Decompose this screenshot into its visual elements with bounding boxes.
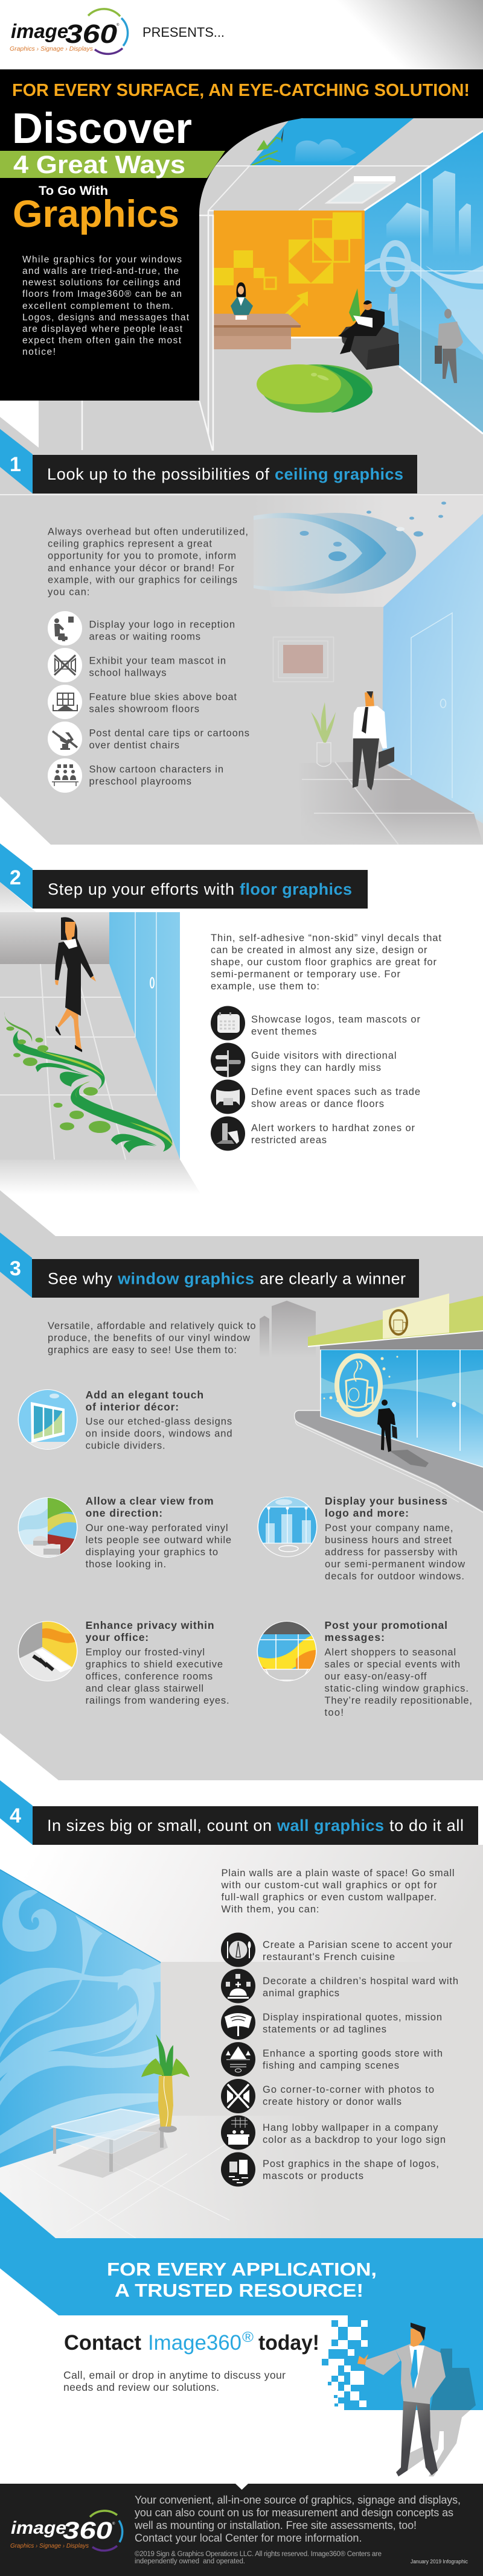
glass table: [51, 2109, 168, 2178]
section 4 illustration: [0, 1821, 483, 2238]
heading: wall graphics: wall graphics: [277, 1816, 384, 1835]
black title panel: [0, 69, 483, 401]
logo: image360 footer: [10, 2511, 123, 2551]
shadow: [405, 2349, 476, 2476]
icon: one-way window: [18, 1497, 78, 1562]
item: interior decor: on inside doors, windows and: [86, 1429, 232, 1439]
list: floor uses: show areas or dance floors: [251, 1099, 384, 1109]
list: floor uses: event themes: [251, 1026, 316, 1037]
contact text: [63, 2369, 286, 2393]
item: privacy: Enhance privacy within: [86, 1619, 214, 1631]
section 1 text: and enhance your décor or brand! For: [48, 563, 234, 574]
list: ceiling uses: Post dental care tips or cartoons: [89, 728, 249, 738]
heading: floor graphics: floor graphics: [240, 880, 352, 898]
section 2 text: semi-permanent or temporary use. For: [211, 969, 401, 980]
list: floor uses: Define event spaces such as trade: [251, 1087, 420, 1097]
legal text: [135, 2551, 382, 2565]
intro text: expect them often gain the most: [22, 335, 182, 346]
section 2 text: Thin, self-adhesive “non-skid” vinyl decals that: [211, 933, 441, 944]
floor: [299, 761, 483, 845]
list: ceiling uses: [48, 611, 249, 793]
floor: [0, 2116, 483, 2238]
icon: reception seating: [48, 611, 82, 646]
heading: window graphics: See why: [48, 1269, 112, 1287]
section 1 text: you can:: [48, 586, 89, 597]
item: business logo: [257, 1495, 465, 1582]
list: wall uses: Decorate a children’s hospital ward with: [263, 1976, 458, 1987]
back wall: [161, 1962, 483, 2119]
intro text: While graphics for your windows: [22, 255, 182, 265]
section 1 text: opportunity for you to promote, inform: [48, 551, 236, 562]
coffee cup decal: [324, 1353, 398, 1417]
list: wall uses: Create a Parisian scene to accent your: [263, 1940, 453, 1950]
item: business logo: decals for outdoor windows.: [325, 1571, 464, 1582]
hero illustration: [82, 118, 483, 451]
footer text: well as mounting or installation. Free site assessments, too!: [134, 2519, 417, 2531]
man with briefcase: [377, 1400, 397, 1452]
sofa and reader: [338, 300, 399, 370]
intro text: notice!: [22, 347, 56, 357]
item: promotional: static-cling window graphics.: [325, 1683, 469, 1694]
contact illustration: [322, 2315, 483, 2476]
item: clear view: those looking in.: [86, 1559, 166, 1570]
logo: image360 footer: Graphics › Signage › Displays: [10, 2542, 89, 2549]
checker pattern: [322, 2315, 483, 2410]
background buildings: [260, 1301, 316, 1357]
section 2 text: shape, our custom floor graphics are great for: [211, 957, 437, 968]
section 3 header: [0, 1232, 419, 1298]
item: interior decor: Add an elegant touch: [86, 1389, 203, 1401]
item: clear view: one direction:: [86, 1507, 162, 1519]
presenter man: [357, 2323, 446, 2476]
heading: wall graphics: to do it all: [389, 1816, 464, 1835]
room edge lines: [82, 211, 214, 451]
storefront illustration: [260, 1293, 483, 1512]
list: floor uses: Showcase logos, team mascots or: [251, 1014, 420, 1025]
heading: wall graphics: In sizes big or small, count on: [47, 1816, 272, 1835]
item: promotional: Alert shoppers to seasonal: [325, 1647, 456, 1658]
logo: image360: 360: [65, 19, 118, 49]
heading: window graphics: [48, 1269, 406, 1287]
list: ceiling uses: preschool playrooms: [89, 776, 191, 787]
legal text: independently owned and operated.: [135, 2558, 245, 2565]
contact text: Call, email or drop in anytime to discuss your: [63, 2369, 286, 2381]
blue wall: [382, 514, 483, 823]
item: interior decor: cubicle dividers.: [86, 1441, 165, 1451]
list: wall uses: color as a backdrop to your logo sign: [263, 2134, 446, 2145]
item: business logo: our semi-permanent window: [325, 1559, 465, 1570]
list: wall uses: statements or ad taglines: [263, 2024, 386, 2035]
heading: to go with: To Go With: [39, 184, 108, 198]
item: promotional: messages:: [325, 1631, 385, 1643]
icon: conference room: [18, 1621, 78, 1683]
list: wall uses: Enhance a sporting goods store with: [263, 2048, 443, 2059]
icon: hallway: [48, 648, 82, 682]
banner heading: [107, 2259, 377, 2301]
section 4 text: full-wall graphics or even custom wallpaper.: [221, 1892, 437, 1903]
item: privacy: Employ our frosted-vinyl: [86, 1647, 205, 1658]
blue banner: [0, 2192, 483, 2315]
list: ceiling uses: areas or waiting rooms: [89, 631, 200, 642]
icon: quotes billboard: [221, 2005, 255, 2040]
list: wall uses: Display inspirational quotes, mission: [263, 2012, 442, 2023]
intro text: excellent complement to them.: [22, 301, 173, 311]
icon: dentist chair: [48, 722, 82, 756]
banner heading: A TRUSTED RESOURCE!: [115, 2280, 363, 2301]
item: business logo: Post your company name,: [325, 1523, 453, 1534]
green vine floor graphic: [5, 1012, 173, 1153]
heading: ceiling graphics: ceiling graphics: [275, 465, 403, 483]
heading: graphics: Graphics: [13, 193, 179, 235]
icon: parisian plate: [221, 1933, 255, 1967]
list: floor uses: restricted areas: [251, 1135, 327, 1146]
list: ceiling uses: Exhibit your team mascot in: [89, 655, 226, 666]
contact heading: ®: [242, 2329, 254, 2346]
intro text: and walls are tried-and-true, the: [22, 266, 179, 276]
intro text: Logos, designs and messages that: [22, 312, 190, 323]
icon: showroom: [48, 685, 82, 719]
section 1 text: ceiling graphics represent a great: [48, 538, 212, 549]
heading: floor graphics: Step up your efforts with: [48, 880, 234, 898]
list: wall uses: Hang lobby wallpaper in a company: [263, 2122, 438, 2133]
intro text: [22, 255, 190, 357]
icon: camping and fishing: [221, 2042, 255, 2076]
footer: [0, 2484, 483, 2576]
plant: [349, 288, 360, 322]
item: privacy: offices, conference rooms: [86, 1671, 213, 1682]
list: wall uses: create history or donor walls: [263, 2096, 401, 2107]
item: promotional: sales or special events with: [325, 1659, 460, 1670]
heading: floor graphics: [48, 880, 352, 898]
section 2 illustration: floor: [0, 882, 201, 1194]
section 2 text: example, use them to:: [211, 981, 319, 992]
footer text: Contact your local Center for more information.: [135, 2532, 362, 2544]
section 3 intro: produce, the benefits of our vinyl window: [48, 1333, 250, 1344]
tagline: FOR EVERY SURFACE, AN EYE-CATCHING SOLUTION!: [12, 81, 470, 100]
item: privacy: railings from wandering eyes.: [86, 1695, 229, 1706]
logo: image360: ®: [117, 23, 120, 27]
skylight: [327, 176, 395, 203]
contact heading: today!: [258, 2331, 319, 2355]
header band: [10, 0, 483, 69]
section 3 intro: [48, 1321, 256, 1356]
list: wall uses: Go corner-to-corner with photos to: [263, 2084, 434, 2095]
list: ceiling uses: Display your logo in reception: [89, 619, 235, 630]
back wall: [0, 912, 109, 964]
intro text: are displayed where people least: [22, 324, 183, 334]
ceiling oval graphic: [254, 502, 446, 594]
item: promotional: too!: [325, 1707, 344, 1718]
picture frame: [273, 637, 333, 682]
section 4 text: With them, you can:: [221, 1904, 319, 1915]
list: ceiling uses: Show cartoon characters in: [89, 764, 223, 775]
orange wall graphic: [214, 211, 365, 338]
section 2 text: can be created in almost any size, design or: [211, 945, 427, 956]
section 3 intro: Versatile, affordable and relatively quick to: [48, 1321, 256, 1331]
ceiling gradient: [0, 1821, 483, 1962]
item: privacy: [18, 1619, 229, 1706]
section 1 background: [0, 401, 483, 845]
item: clear view: lets people see outward while: [86, 1535, 231, 1546]
list: wall uses: [221, 1933, 458, 2186]
ceiling sky graphic: [249, 118, 414, 166]
ceiling area: [254, 495, 483, 607]
contact heading: Image360: [148, 2331, 242, 2355]
list: floor uses: [211, 1006, 420, 1151]
heading: window graphics: window graphics: [117, 1269, 254, 1287]
logo: image360 footer: 360: [63, 2517, 112, 2544]
list: floor uses: signs they can hardly miss: [251, 1062, 381, 1073]
section 2 header: [0, 843, 368, 909]
section 4 text: with our custom-cut wall graphics or opt for: [221, 1880, 437, 1891]
heading: ceiling graphics: Look up to the possibilities of: [47, 465, 269, 483]
number 1: 1: [10, 453, 21, 476]
item: interior decor: of interior décor:: [86, 1401, 179, 1413]
section 1 text: example, with our graphics for ceilings: [48, 574, 237, 585]
item: promotional: They’re readily repositionable,: [325, 1695, 472, 1706]
potted plant: [311, 702, 336, 766]
contact text: needs and review our solutions.: [63, 2381, 219, 2393]
list: floor uses: Guide visitors with directional: [251, 1050, 396, 1061]
number 3: 3: [10, 1257, 21, 1280]
green ribbon: 4 Great Ways: [13, 150, 185, 179]
white corner: [0, 401, 39, 448]
item: interior decor: Use our etched-glass designs: [86, 1416, 232, 1427]
list: wall uses: restaurant's French cuisine: [263, 1952, 395, 1962]
icon: hardhat zone: [211, 1116, 245, 1151]
heading: ceiling graphics: [47, 465, 403, 483]
glass wall: [364, 131, 483, 434]
item: promotional: [257, 1619, 472, 1718]
heading: window graphics: are clearly a winner: [260, 1269, 406, 1287]
list: wall uses: Post graphics in the shape of logos,: [263, 2159, 439, 2169]
intro text: newest solutions for ceilings and: [22, 278, 181, 288]
item: privacy: graphics to shield executive: [86, 1659, 223, 1670]
icon: event space: [211, 1080, 245, 1114]
section 1: ceiling: [254, 495, 483, 845]
vase and plant: [141, 2034, 190, 2133]
number 4: 4: [10, 1804, 21, 1827]
list: ceiling uses: Feature blue skies above boat: [89, 691, 237, 702]
logo: image360: [10, 9, 128, 54]
section 4 header: [0, 1780, 478, 1845]
footer text: Your convenient, all-in-one source of graphics, signage and displays,: [135, 2494, 461, 2506]
item: business logo: business hours and street: [325, 1535, 452, 1546]
icon: hospital: [221, 1969, 255, 2003]
list: floor uses: Alert workers to hardhat zones or: [251, 1123, 415, 1134]
banner heading: FOR EVERY APPLICATION,: [107, 2259, 377, 2280]
item: clear view: [18, 1495, 231, 1570]
section 1 text: Always overhead but often underutilized,: [48, 526, 248, 537]
icon: calendar: [211, 1006, 245, 1040]
window: [321, 1350, 483, 1467]
number 2: 2: [10, 866, 21, 889]
businessman: [353, 691, 394, 790]
section 3 background: [0, 1190, 483, 1780]
section 2 text: [211, 933, 441, 992]
icon: city window: [257, 1497, 318, 1558]
presents: PRESENTS...: [142, 25, 225, 40]
footer text: you can also count on us for measurement and design concepts as: [135, 2507, 453, 2519]
reception desk: [214, 314, 301, 349]
item: privacy: and clear glass stairwell: [86, 1683, 203, 1694]
patterned blue wall: [0, 1870, 161, 2171]
icon: preschool: [48, 758, 82, 793]
intro text: floors from Image360® can be an: [22, 289, 182, 299]
section 1 header: [0, 429, 483, 495]
ceiling lines: [208, 166, 430, 211]
contact heading: [64, 2329, 319, 2355]
sidewalk: [295, 1410, 483, 1512]
walking woman: [55, 917, 96, 1052]
receptionist: [231, 282, 253, 320]
heading: discover: Discover: [12, 105, 192, 153]
list: wall uses: mascots or products: [263, 2171, 363, 2181]
icon: promo window: [257, 1621, 316, 1683]
section 1 text: [48, 526, 248, 597]
fade under floor: [0, 1160, 201, 1194]
item: interior decor: [18, 1389, 232, 1451]
list: wall uses: animal graphics: [263, 1988, 339, 1999]
awning: [308, 1293, 483, 1350]
contact block: [63, 2329, 319, 2393]
section 3 intro: graphics are easy to see! Use them to:: [48, 1345, 237, 1356]
list: wall uses: fishing and camping scenes: [263, 2060, 399, 2071]
icon: directional sign: [211, 1042, 245, 1077]
blue wall: [109, 912, 180, 1160]
item: privacy: your office:: [86, 1631, 149, 1643]
item: business logo: address for passersby with: [325, 1547, 458, 1558]
icon: corner walls: [221, 2079, 255, 2113]
logo: image360 footer: ®: [112, 2522, 115, 2526]
bottom-left corner: [0, 796, 51, 845]
date: January 2019 Infographic: [411, 2559, 468, 2565]
green rug: [257, 364, 373, 413]
section 4 text: [221, 1868, 454, 1915]
section 4 text: Plain walls are a plain waste of space! Go small: [221, 1868, 454, 1879]
legal text: ©2019 Sign & Graphics Operations LLC. All rights reserved. Image360® Centers are: [135, 2551, 382, 2558]
logo: image360: Graphics › Signage › Displays: [10, 45, 94, 52]
heading: wall graphics: [47, 1816, 464, 1835]
item: clear view: Our one-way perforated vinyl: [86, 1523, 228, 1534]
item: promotional: our easy-on/easy-off: [325, 1671, 427, 1682]
item: business logo: logo and more:: [325, 1507, 409, 1519]
item: clear view: Allow a clear view from: [86, 1495, 214, 1507]
icon: logo shapes: [221, 2152, 255, 2186]
contact heading: Contact: [64, 2331, 141, 2355]
logo: image360 footer: image: [11, 2518, 66, 2538]
item: clear view: displaying your graphics to: [86, 1547, 218, 1558]
item: business logo: Display your business: [325, 1495, 447, 1507]
glass wall figure: [388, 287, 398, 326]
walking man: [435, 309, 463, 383]
list: ceiling uses: school hallways: [89, 667, 167, 678]
list: ceiling uses: over dentist chairs: [89, 740, 179, 750]
list: ceiling uses: sales showroom floors: [89, 703, 199, 714]
footer text: [134, 2494, 461, 2544]
item: promotional: Post your promotional: [325, 1619, 447, 1631]
floor: [0, 964, 180, 1160]
icon: lobby desk: [221, 2115, 255, 2150]
logo: image360: image: [11, 20, 68, 42]
icon: etched window: [18, 1389, 77, 1450]
